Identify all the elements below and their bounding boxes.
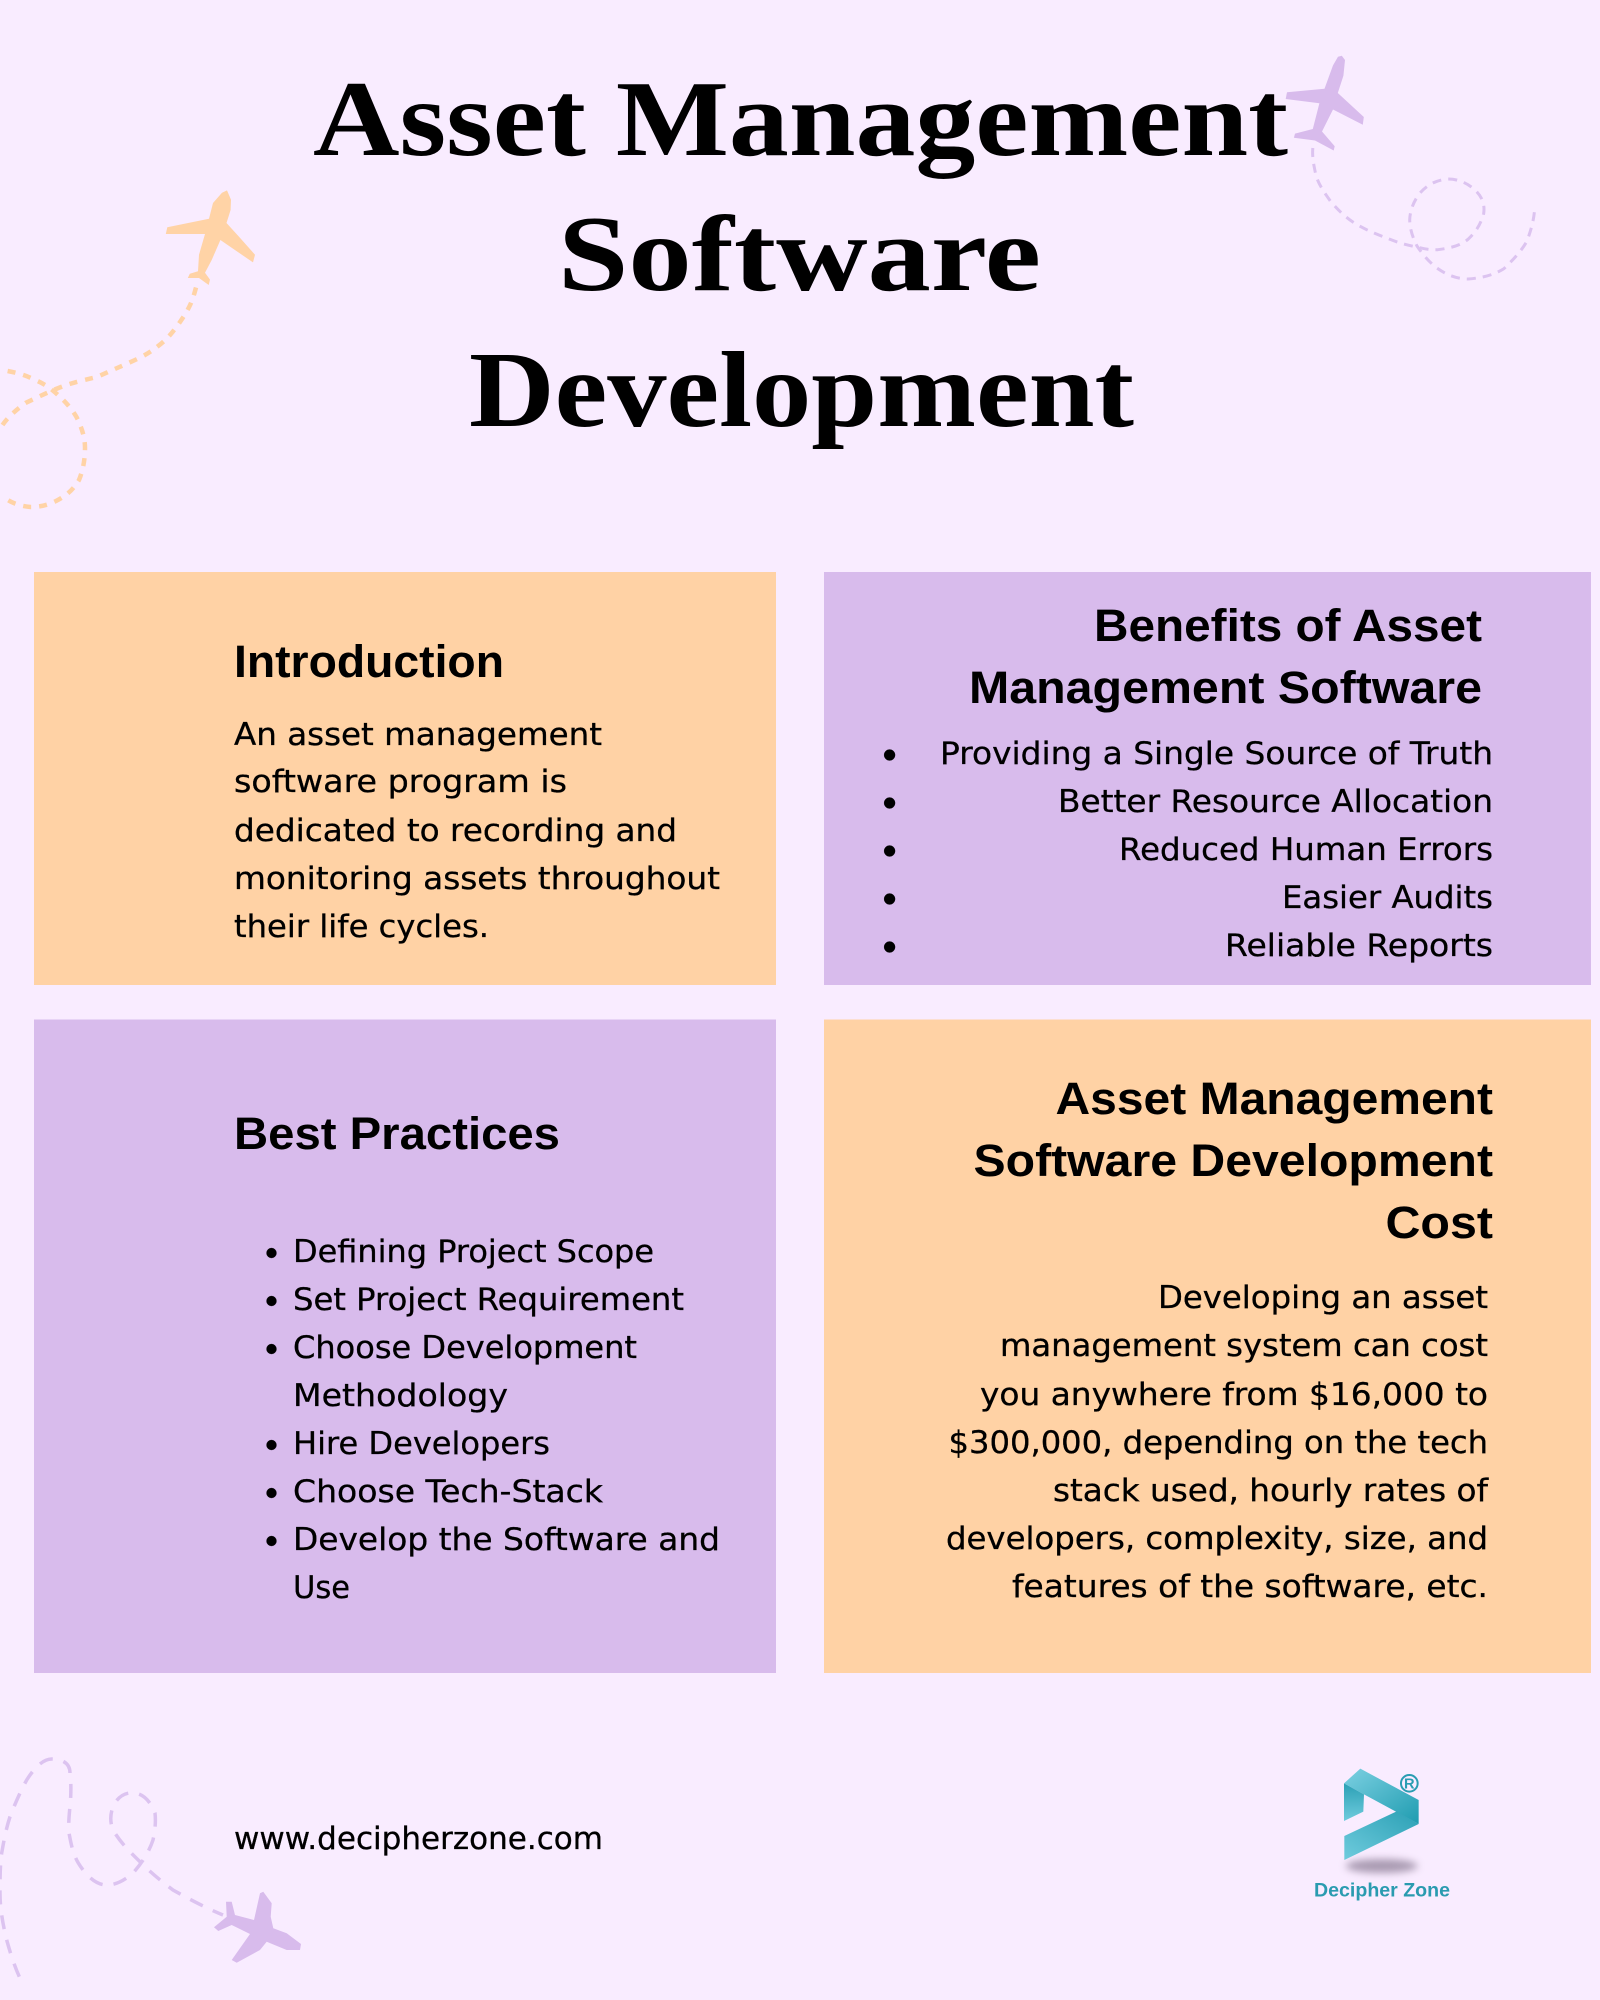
list: benefits: Reduced Human Errors	[1119, 832, 1493, 868]
logo shadow	[1346, 1859, 1418, 1873]
list: best practices: Choose Tech-Stack	[293, 1474, 603, 1510]
list: benefits: Providing a Single Source of Truth	[940, 736, 1493, 772]
heading: benefits: Benefits of Asset	[1094, 600, 1482, 651]
text block: introduction body: dedicated to recording and	[234, 813, 677, 849]
title	[313, 60, 1288, 450]
footer website: www.decipherzone.com	[234, 1821, 603, 1857]
text block: introduction body: their life cycles.	[234, 909, 489, 945]
list: best practices: Defining Project Scope	[293, 1234, 654, 1270]
title: Development	[469, 331, 1134, 450]
list: best practices: Hire Developers	[293, 1426, 550, 1462]
text block: development cost body: you anywhere from $16,000 to	[980, 1377, 1488, 1413]
list: best practices: Use	[293, 1570, 350, 1606]
decoration: purple plane and dashed trail, bottom left	[0, 1759, 301, 1977]
heading: benefits	[969, 600, 1482, 713]
text block: development cost body: developers, complexity, size, and	[946, 1521, 1488, 1557]
text block: development cost body: Developing an asset	[1158, 1280, 1488, 1316]
icon: purple plane	[214, 1892, 301, 1963]
list: benefits	[884, 736, 1493, 964]
list: benefits: Reliable Reports	[1225, 928, 1493, 964]
heading: development cost: Asset Management	[1056, 1073, 1493, 1124]
heading: benefits: Management Software	[969, 662, 1482, 713]
text block: development cost body: stack used, hourly rates of	[1053, 1473, 1489, 1509]
text block: development cost body	[946, 1280, 1489, 1605]
panel: introduction	[34, 572, 776, 985]
logo mark: R	[1404, 1777, 1415, 1793]
panel: benefits	[824, 572, 1591, 985]
decoration: purple plane and dashed trail, top right	[1286, 56, 1535, 279]
text block: introduction body: software program is	[234, 764, 567, 800]
text block: introduction body	[234, 717, 720, 945]
icon: purple plane	[1286, 56, 1364, 150]
list: best practices: Set Project Requirement	[293, 1282, 684, 1318]
icon: orange plane	[166, 190, 255, 285]
heading: best practices: Best Practices	[234, 1108, 560, 1159]
heading: introduction: Introduction	[234, 636, 504, 687]
panel: development cost	[824, 1020, 1591, 1673]
list: benefits: Easier Audits	[1282, 880, 1493, 916]
logo: Decipher Zone	[1314, 1769, 1450, 1902]
title: Software	[558, 195, 1041, 314]
logo wordmark: Decipher Zone	[1314, 1881, 1450, 1902]
text block: introduction body: An asset management	[234, 717, 602, 753]
list: best practices: Methodology	[293, 1378, 508, 1414]
text block: development cost body: features of the software, etc.	[1012, 1569, 1488, 1605]
heading: development cost: Software Development	[974, 1135, 1493, 1186]
list: best practices	[266, 1234, 720, 1606]
list: best practices: Develop the Software and	[293, 1522, 720, 1558]
text block: introduction body: monitoring assets throughout	[234, 861, 720, 897]
heading: development cost	[974, 1073, 1493, 1248]
list: benefits: Better Resource Allocation	[1058, 784, 1493, 820]
decoration: orange plane and dashed trail	[2, 190, 255, 507]
text block: development cost body: management system can cost	[1000, 1328, 1488, 1364]
heading: development cost: Cost	[1386, 1197, 1493, 1248]
title: Asset Management	[313, 60, 1288, 179]
text block: development cost body: $300,000, depending on the tech	[948, 1425, 1488, 1461]
panel: best practices	[34, 1020, 776, 1673]
list: best practices: Choose Development	[293, 1330, 637, 1366]
